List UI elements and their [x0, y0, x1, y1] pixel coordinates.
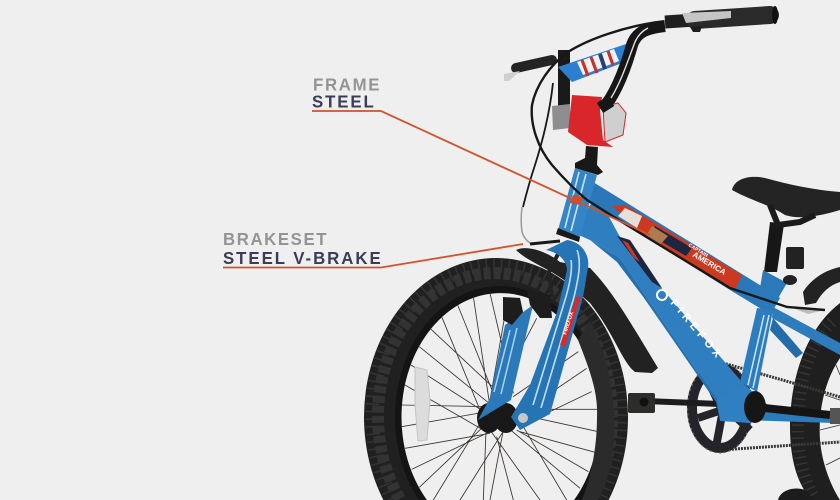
bottom bracket shell	[717, 385, 768, 423]
label: frame heading: FRAME	[313, 74, 380, 95]
spokes	[402, 293, 599, 500]
callout: brakeset	[223, 229, 523, 268]
seat collar	[758, 270, 787, 310]
rear fender bracket	[803, 267, 840, 305]
seat stays and chain stay	[772, 307, 840, 355]
callout: frame	[312, 74, 650, 235]
crossbar pad	[558, 42, 632, 82]
top tube	[587, 182, 780, 312]
front hub	[477, 403, 518, 433]
right crank arm	[744, 391, 840, 424]
seat tube	[740, 308, 773, 392]
fork logo: FIREFOX	[562, 311, 575, 336]
wheel opening	[401, 293, 600, 500]
handlebar	[504, 6, 778, 110]
frame	[556, 168, 840, 423]
leader line: brakeset	[223, 244, 523, 268]
leader line: frame	[312, 111, 650, 235]
label: frame value: STEEL	[312, 91, 374, 112]
down tube sticker: FIREFOX	[668, 297, 724, 361]
head tube	[558, 168, 597, 237]
chain	[720, 363, 840, 450]
headset ring	[556, 228, 580, 242]
label: brakeset value: STEEL V-BRAKE	[223, 248, 381, 268]
far fork leg	[478, 305, 533, 420]
top tube sticker: CAPTAIN	[687, 243, 709, 259]
stem and headset	[575, 146, 603, 175]
front fender	[516, 248, 658, 373]
front wheel	[364, 258, 628, 500]
tyre	[364, 258, 628, 500]
left crank and pedal	[628, 393, 720, 413]
left grip and lever	[516, 60, 552, 68]
handlebar left rise	[558, 50, 570, 106]
brake cables	[521, 22, 825, 310]
near fork leg	[511, 240, 588, 430]
chainring	[688, 363, 752, 453]
right grip	[665, 20, 695, 22]
top tube sticker: AMERICA	[691, 250, 728, 277]
saddle	[732, 177, 840, 225]
rim	[578, 320, 614, 500]
down tube	[572, 195, 750, 423]
label: brakeset heading: BRAKESET	[223, 229, 327, 249]
down tube sticker	[617, 236, 724, 361]
illustration: bicycle	[364, 6, 840, 500]
seat post	[764, 222, 784, 272]
right brake lever	[682, 11, 731, 23]
rear brake cable end	[790, 307, 825, 314]
front reflector	[552, 95, 626, 147]
v-brake calipers	[503, 250, 560, 325]
rear wheel	[778, 303, 840, 500]
spoke reflector	[415, 367, 430, 441]
top tube sticker	[612, 205, 742, 290]
